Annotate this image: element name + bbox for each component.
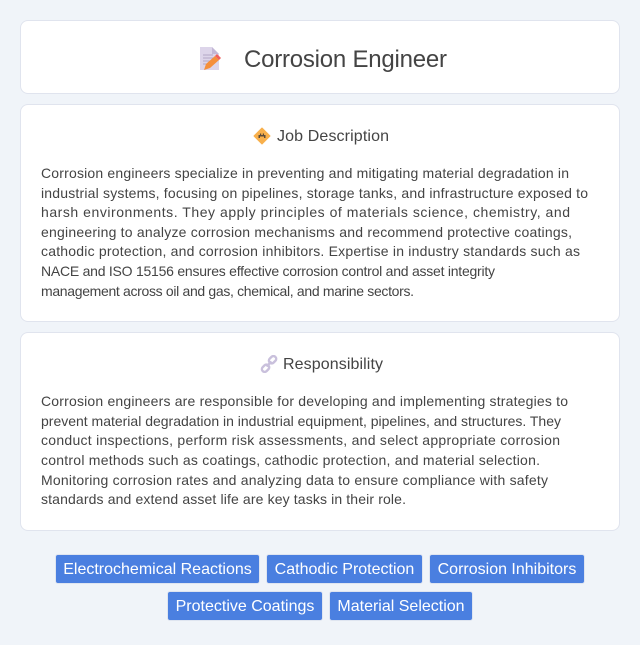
icon: chain link — [260, 355, 278, 373]
text block: responsibility: conduct inspections, perform risk assessments, and select appropriate corrosion — [41, 432, 560, 448]
text block: responsibility: Corrosion engineers are responsible for developing and implementing strategies to — [41, 393, 568, 409]
tag: corrosion inhibitors: Corrosion Inhibitors — [438, 561, 576, 578]
text block: responsibility: control methods such as coatings, cathodic protection, and material selection. — [41, 452, 540, 468]
tag: protective coatings: Protective Coatings — [176, 598, 314, 615]
text block: job description: cathodic protection, and corrosion inhibitors. Expertise in industry standards such as — [41, 243, 580, 259]
icon: diamond sign — [254, 128, 270, 144]
text block: job description: management across oil and gas, chemical, and marine sectors. — [41, 283, 414, 299]
tag: material selection: Material Selection — [337, 598, 465, 615]
text block: job description: harsh environments. They apply principles of materials science, chemistry, and — [41, 204, 570, 220]
text block: job description: industrial systems, focusing on pipelines, storage tanks, and infrastructure exposed to — [41, 185, 588, 201]
panel: title card — [20, 20, 620, 94]
panel: responsibility — [20, 332, 620, 531]
text block: job description — [41, 165, 588, 299]
text block: responsibility: prevent material degradation in industrial equipment, pipelines, and structures. They — [41, 413, 561, 429]
tag: electrochemical reactions — [55, 554, 260, 584]
tag: cathodic protection — [266, 554, 423, 584]
title: Corrosion Engineer — [244, 46, 447, 73]
icon: document with pencil — [200, 47, 221, 70]
text block: job description: NACE and ISO 15156 ensures effective corrosion control and asset integrity — [41, 263, 495, 279]
tag: material selection — [329, 591, 473, 621]
text block: responsibility: Monitoring corrosion rates and analyzing data to ensure compliance with safety — [41, 472, 548, 488]
panel: job description — [20, 104, 620, 322]
text block: job description: Corrosion engineers specialize in preventing and mitigating material degradation in — [41, 165, 569, 181]
text block: job description: engineering to analyze corrosion mechanisms and recommend protective coatings, — [41, 224, 572, 240]
tag: corrosion inhibitors — [429, 554, 585, 584]
text block: responsibility — [41, 393, 568, 507]
heading: job description: Job Description — [277, 128, 389, 145]
tag: electrochemical reactions: Electrochemical Reactions — [63, 561, 252, 578]
tag: protective coatings — [167, 591, 323, 621]
text block: responsibility: standards and extend asset life are key tasks in their role. — [41, 491, 406, 507]
tag: cathodic protection: Cathodic Protection — [275, 561, 414, 578]
heading: responsibility: Responsibility — [283, 356, 383, 373]
